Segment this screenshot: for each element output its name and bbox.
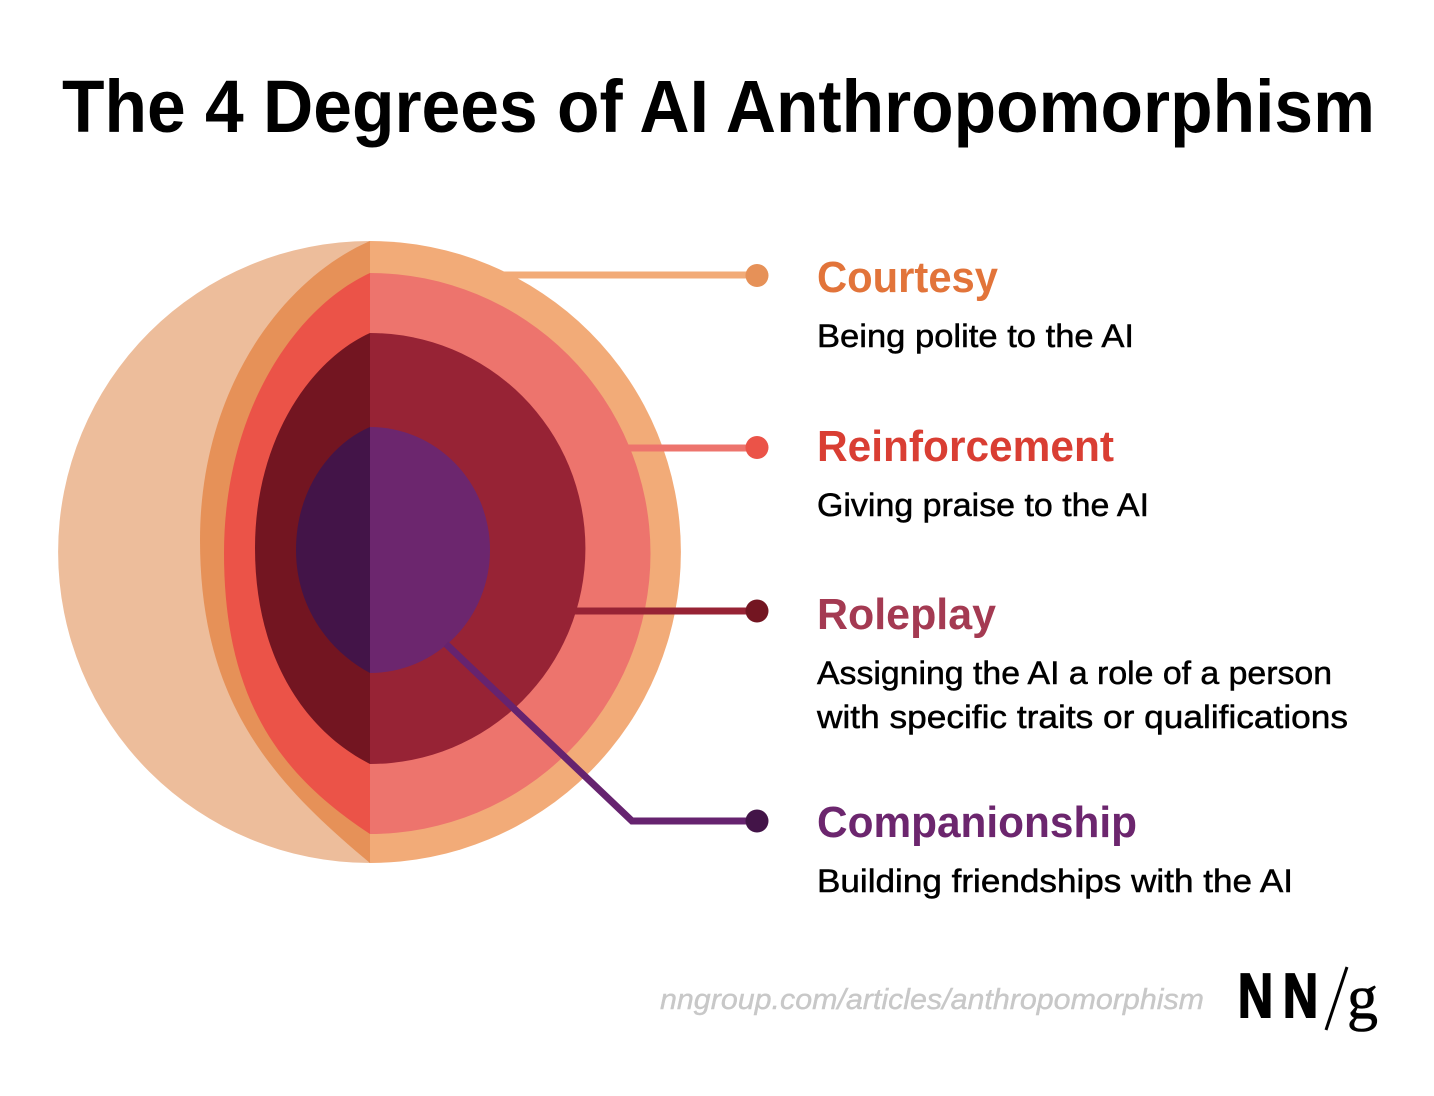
- connector: companionship: [446, 644, 768, 832]
- item: roleplay: Roleplay: [817, 590, 997, 639]
- layer: reinforcement: [224, 273, 651, 834]
- layer: roleplay: [255, 333, 585, 764]
- logo: NN/g: N: [1283, 962, 1318, 1031]
- layer: companionship: [296, 427, 490, 673]
- source url: nngroup.com/articles/anthropomorphism: [660, 984, 1204, 1016]
- item: roleplay: Assigning the AI a role of a person: [817, 655, 1332, 691]
- connector: courtesy: [500, 264, 768, 287]
- item: courtesy: Being polite to the AI: [817, 318, 1134, 354]
- item: roleplay: [816, 590, 1348, 735]
- item: companionship: Companionship: [817, 798, 1137, 847]
- item: companionship: Building friendships with the AI: [817, 863, 1293, 899]
- item: courtesy: [817, 253, 1134, 354]
- item: companionship: [817, 798, 1293, 899]
- logo: NN/g: [1238, 962, 1378, 1032]
- layer: courtesy: [58, 241, 681, 863]
- item: reinforcement: Reinforcement: [817, 422, 1114, 471]
- connector: roleplay: [574, 600, 768, 622]
- connector: reinforcement: [628, 436, 768, 459]
- item: roleplay: with specific traits or qualifications: [816, 699, 1348, 735]
- logo: NN/g: g: [1347, 964, 1378, 1032]
- diagram: nested spheres: [58, 241, 681, 863]
- logo: NN/g: N: [1238, 962, 1273, 1031]
- item: reinforcement: Giving praise to the AI: [817, 487, 1149, 523]
- item: courtesy: Courtesy: [817, 253, 999, 302]
- item: reinforcement: [817, 422, 1149, 523]
- title: The 4 Degrees of AI Anthropomorphism: [62, 65, 1375, 148]
